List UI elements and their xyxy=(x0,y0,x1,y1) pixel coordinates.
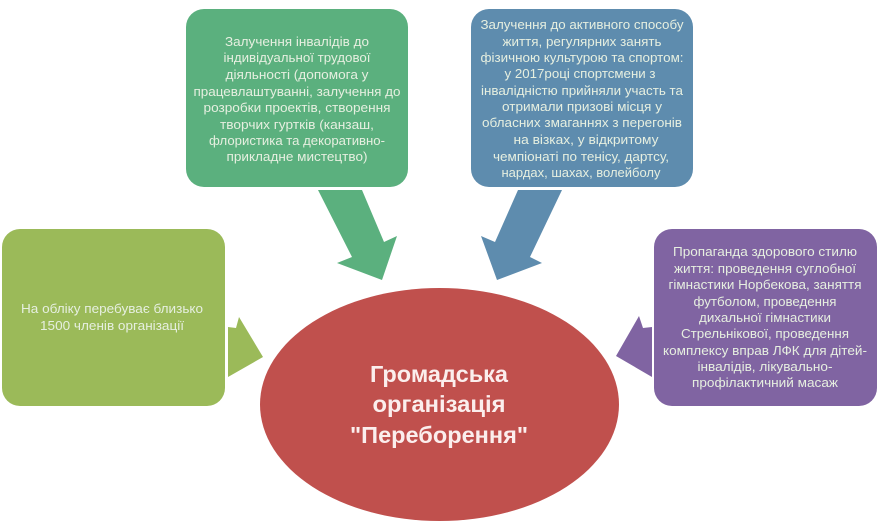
panel: membership xyxy=(2,229,225,406)
heading: organisation name: "Переборення" xyxy=(350,422,528,448)
arrow: olive box to ellipse xyxy=(228,317,263,377)
text: active lifestyle and sport: Залучення до активного способу xyxy=(480,17,684,32)
heading: organisation name xyxy=(350,361,528,448)
text: employment involvement: діяльності (допомога у xyxy=(226,67,369,82)
text: active lifestyle and sport: життя, регулярних занять xyxy=(502,34,662,49)
panel: active lifestyle and sport xyxy=(471,9,693,187)
text: healthy lifestyle: футболом, проведення xyxy=(694,294,836,309)
text: active lifestyle and sport: у 2017році спортсмени з xyxy=(504,66,656,81)
text: active lifestyle and sport: на візках, у відкритому xyxy=(514,132,659,147)
text: healthy lifestyle: життя: проведення суглобної xyxy=(674,261,856,276)
arrow: blue box to ellipse xyxy=(481,190,562,280)
panel: healthy lifestyle xyxy=(654,229,877,406)
text: employment involvement: Залучення інвалідів до xyxy=(225,34,369,49)
text: healthy lifestyle: профілактичний масаж xyxy=(692,375,838,390)
text: healthy lifestyle: комплексу вправ ЛФК для дітей- xyxy=(663,343,867,358)
text: healthy lifestyle: Стрельнікової, проведення xyxy=(681,326,849,341)
text: active lifestyle and sport: обласних змаганнях з перегонів xyxy=(482,115,682,130)
panel: employment involvement xyxy=(186,9,408,187)
text: employment involvement: працевлаштуванні, залучення до xyxy=(194,84,400,99)
text: employment involvement xyxy=(194,34,400,164)
text: active lifestyle and sport: інвалідністю прийняли участь та xyxy=(481,83,684,98)
heading: organisation name: Громадська xyxy=(370,361,508,387)
arrow: purple box to ellipse xyxy=(616,316,652,377)
text: healthy lifestyle: гімнастики Норбекова, заняття xyxy=(668,277,862,292)
heading: organisation name: організація xyxy=(372,391,506,417)
text: active lifestyle and sport: отримали призові місця у xyxy=(502,99,663,114)
text: membership: На обліку перебуває близько xyxy=(21,301,203,316)
text: active lifestyle and sport xyxy=(480,17,684,180)
text: healthy lifestyle: дихальної гімнастики xyxy=(699,310,831,325)
text: healthy lifestyle: інвалідів, лікувально- xyxy=(698,359,832,374)
text: employment involvement: індивідуальної трудової xyxy=(224,50,371,65)
text: membership: 1500 членів організації xyxy=(40,318,184,333)
central ellipse xyxy=(260,288,619,521)
text: active lifestyle and sport: фізичною культурою та спортом: xyxy=(480,50,684,65)
text: employment involvement: прикладне мистецтво) xyxy=(226,149,368,164)
text: active lifestyle and sport: чемпіонаті по тенісу, дартсу, xyxy=(493,149,669,164)
text: membership xyxy=(21,301,203,333)
arrow: green box to ellipse xyxy=(318,190,397,280)
text: healthy lifestyle xyxy=(663,244,867,390)
text: employment involvement: флористика та декоративно- xyxy=(209,133,385,148)
text: employment involvement: творчих гуртків (канзаш, xyxy=(220,117,374,132)
text: healthy lifestyle: Пропаганда здорового стилю xyxy=(673,244,857,259)
text: employment involvement: розробки проектів, створення xyxy=(204,100,390,115)
text: active lifestyle and sport: нардах, шахах, волейболу xyxy=(502,165,661,180)
